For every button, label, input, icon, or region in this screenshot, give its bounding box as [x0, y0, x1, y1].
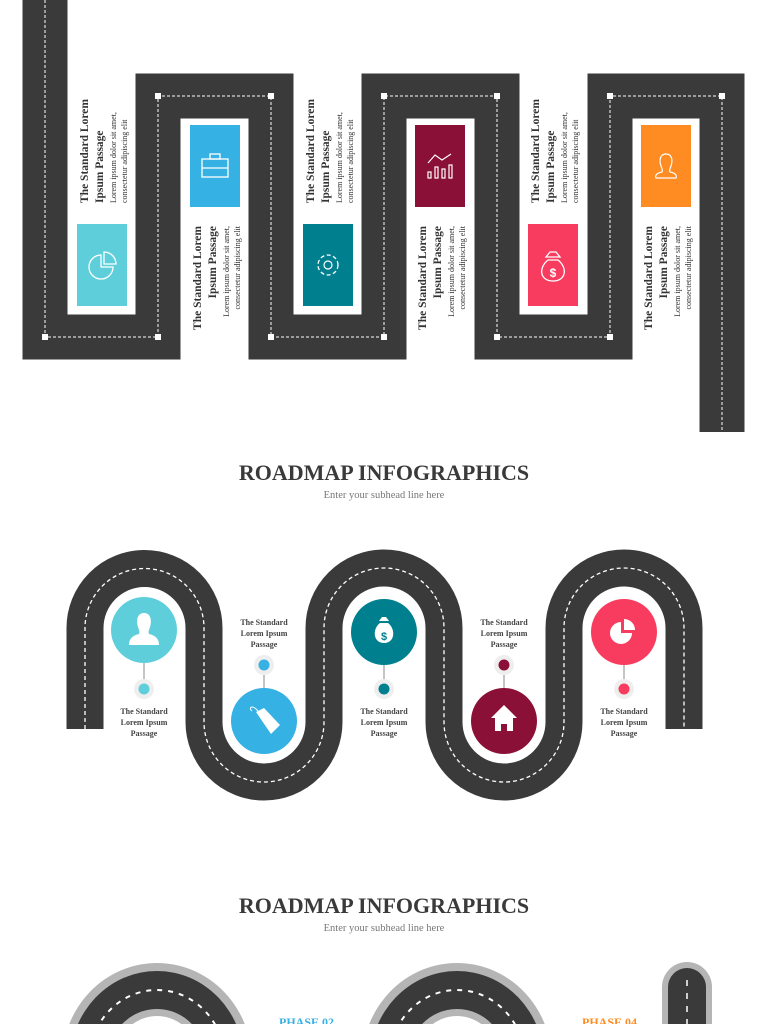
step 6 text [643, 225, 693, 330]
step 4 text: Ipsum Passage [432, 226, 444, 299]
step 3 text: consectetur adipiscing elit [346, 119, 355, 203]
step 2 text: Lorem ipsum dolor sit amet, [222, 226, 231, 317]
milestone 5: pie: Passage [611, 729, 638, 738]
step 3 text: Ipsum Passage [320, 130, 332, 203]
milestone 4: home: Lorem Ipsum [481, 629, 528, 638]
step 5 text: consectetur adipiscing elit [571, 119, 580, 203]
step 1 text [79, 99, 129, 203]
step 5 text: The Standard Lorem [530, 99, 542, 203]
milestone 3: money [351, 599, 417, 738]
milestone 3: money: Passage [371, 729, 398, 738]
step 2: briefcase box [190, 125, 240, 207]
step 5: money bag box [528, 224, 578, 306]
bottom road pill [662, 962, 712, 1024]
step 5 text [530, 99, 580, 203]
title 2: ROADMAP INFOGRAPHICS [239, 460, 529, 485]
step 5 text: Ipsum Passage [545, 130, 557, 203]
milestone 4: home: The Standard [480, 618, 528, 627]
step 2 text: Ipsum Passage [207, 226, 219, 299]
step 4: growth chart box [415, 125, 465, 207]
milestone 5: pie: Lorem Ipsum [601, 718, 648, 727]
milestone 5: pie: The Standard [600, 707, 648, 716]
milestone 1: user: Passage [131, 729, 158, 738]
step 6 text: Lorem ipsum dolor sit amet, [673, 226, 682, 317]
step 2 text [192, 225, 242, 330]
step 1 text: Ipsum Passage [94, 130, 106, 203]
milestone 2: tag: Passage [251, 640, 278, 649]
milestone 1: user: Lorem Ipsum [121, 718, 168, 727]
milestone 3: money: $ [381, 631, 387, 643]
step 5 text: Lorem ipsum dolor sit amet, [560, 112, 569, 203]
step 3 text: The Standard Lorem [305, 99, 317, 203]
milestone 3: money: The Standard [360, 707, 408, 716]
serpentine road [85, 568, 684, 782]
milestone 4: home [471, 618, 537, 754]
step 3 text: Lorem ipsum dolor sit amet, [335, 112, 344, 203]
bottom road arc 2 [362, 963, 552, 1024]
step 5: money bag box: $ [550, 266, 557, 280]
step 6: user box [641, 125, 691, 207]
title 3: ROADMAP INFOGRAPHICS [239, 893, 529, 918]
milestone 1: user: The Standard [120, 707, 168, 716]
step 1: chart box [77, 224, 127, 306]
bottom road arc 1 [62, 963, 252, 1024]
step 6 text: The Standard Lorem [643, 226, 655, 330]
milestone 1: user [111, 597, 177, 738]
top zigzag road [42, 0, 725, 432]
step 4 text: The Standard Lorem [417, 226, 429, 330]
step 4 text: consectetur adipiscing elit [458, 225, 467, 310]
step 2 text: consectetur adipiscing elit [233, 225, 242, 310]
milestone 2: tag: Lorem Ipsum [241, 629, 288, 638]
step 1 text: The Standard Lorem [79, 99, 91, 203]
subhead 2: Enter your subhead line here [324, 490, 445, 501]
step 2 text: The Standard Lorem [192, 226, 204, 330]
step 1 text: consectetur adipiscing elit [120, 119, 129, 203]
step 3 text [305, 99, 355, 203]
milestone 3: money: Lorem Ipsum [361, 718, 408, 727]
step 6 text: Ipsum Passage [658, 226, 670, 299]
step 3: gear box [303, 224, 353, 306]
milestone 4: home: Passage [491, 640, 518, 649]
milestone 2: tag [231, 618, 297, 754]
milestone 2: tag: The Standard [240, 618, 288, 627]
step 4 text: Lorem ipsum dolor sit amet, [447, 226, 456, 317]
step 4 text [417, 225, 467, 330]
milestone 5: pie [591, 599, 657, 738]
step 1 text: Lorem ipsum dolor sit amet, [109, 112, 118, 203]
subhead 3: Enter your subhead line here [324, 923, 445, 934]
step 6 text: consectetur adipiscing elit [684, 225, 693, 310]
